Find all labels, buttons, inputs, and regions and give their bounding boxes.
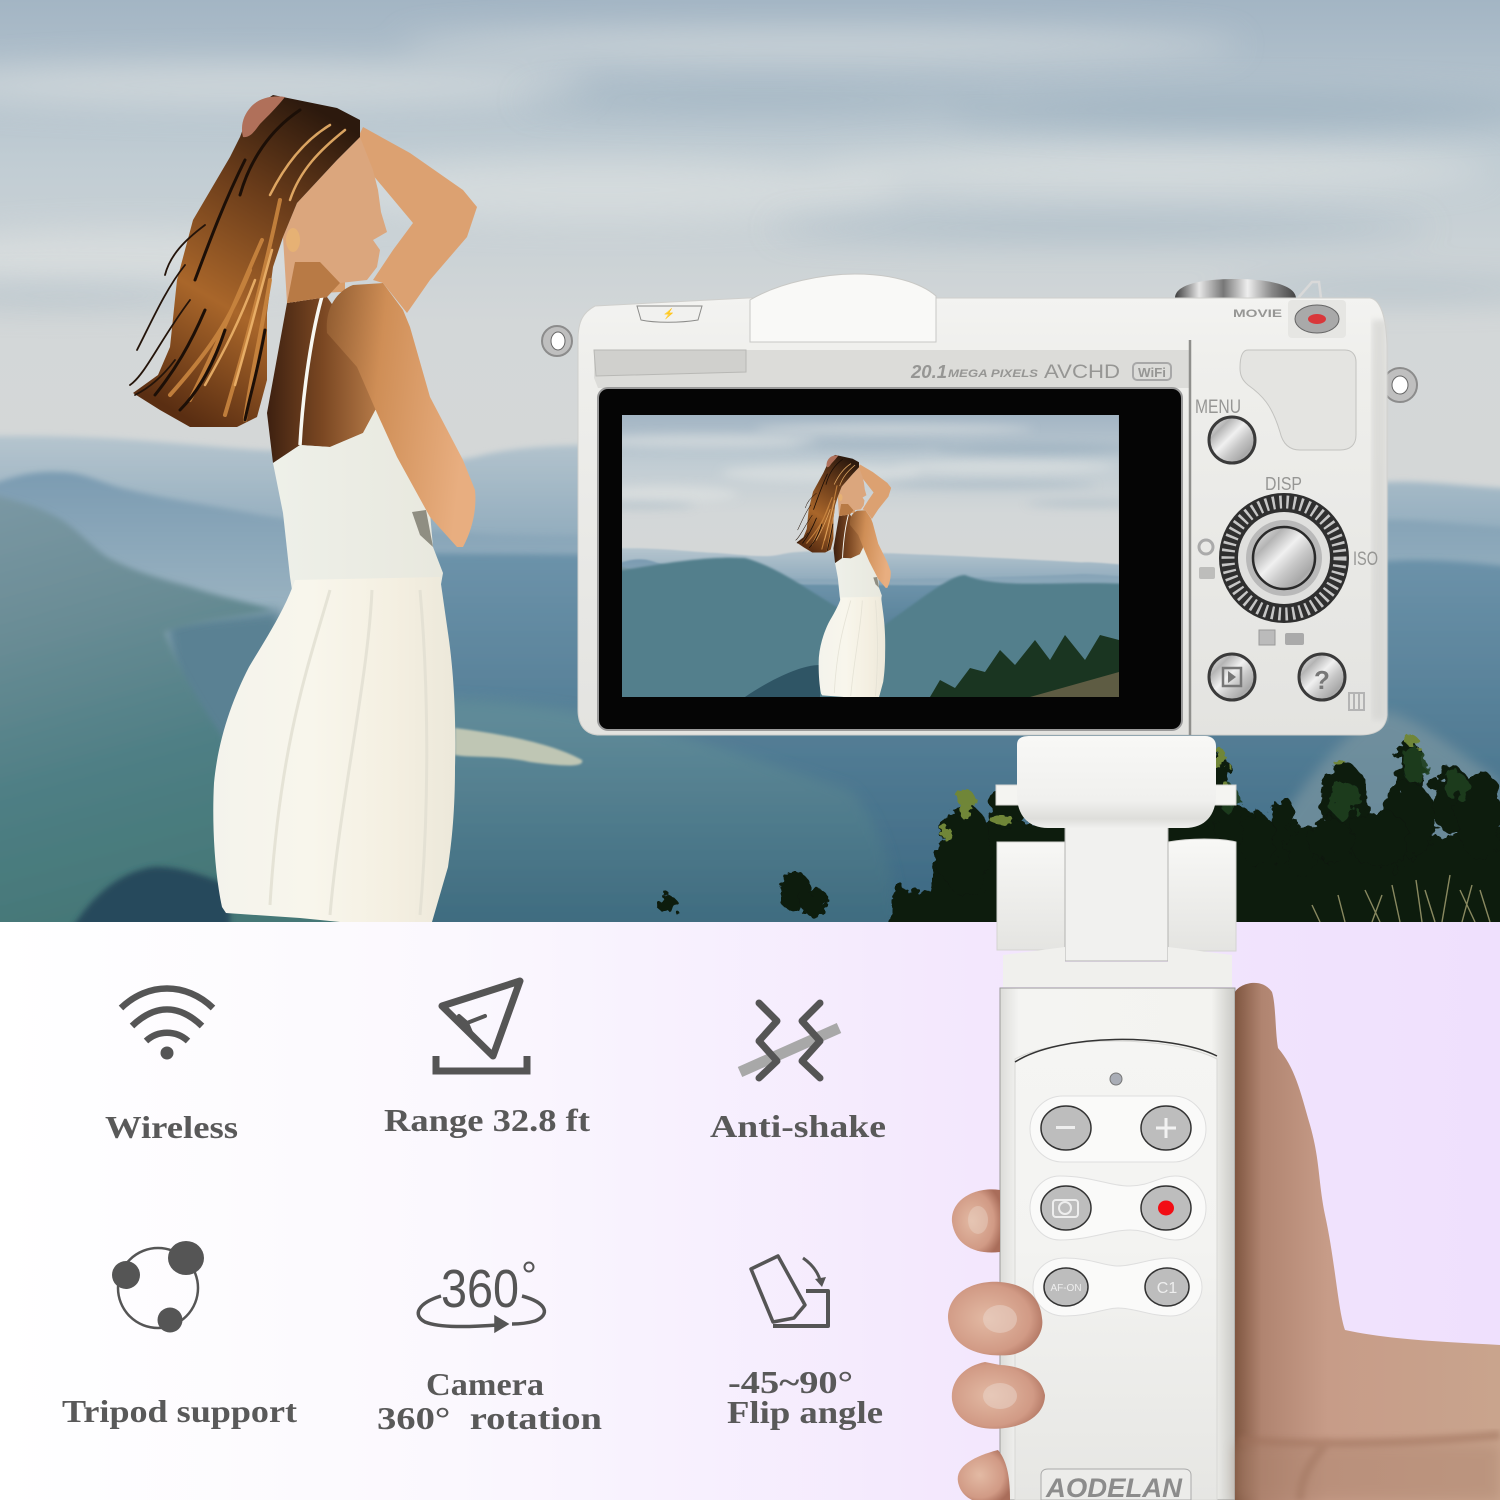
icon: flip screen — [751, 1256, 828, 1326]
preview grass — [1030, 672, 1119, 697]
flash hot-shoe plate — [594, 350, 746, 376]
icon: 360 degree orbit: 360 — [441, 1259, 519, 1319]
lower palm shadow — [1235, 1445, 1500, 1500]
panel top edge — [1015, 1039, 1217, 1062]
camera mount head — [1017, 736, 1216, 828]
finger two — [948, 1282, 1042, 1355]
icon: paper plane over tray — [436, 981, 527, 1071]
palm and thumb — [1235, 983, 1500, 1500]
palm crease shading — [1240, 1435, 1500, 1500]
tilt arm — [1065, 825, 1168, 961]
background photo: sky and mountains — [0, 0, 1500, 960]
zoom buttons — [1030, 1096, 1206, 1162]
flash button: ⚡ — [663, 307, 675, 320]
shutter and record buttons — [1030, 1176, 1206, 1240]
camera body — [578, 298, 1387, 735]
label: camera 360 rotation: 360° rotation — [377, 1400, 602, 1436]
icon: 360 degree orbit — [418, 1259, 544, 1330]
treeline at lower right of photo — [659, 737, 1500, 940]
control wheel — [1199, 474, 1378, 645]
tripod grip — [996, 736, 1236, 1500]
right edge shading — [1372, 320, 1387, 720]
menu button: MENU — [1195, 397, 1241, 418]
camera specification text: AVCHD — [1044, 362, 1120, 383]
camera specification text: WiFi — [1138, 365, 1166, 380]
custom buttons: AF-ON — [1050, 1283, 1082, 1294]
camera specification text: MEGA PIXELS — [948, 368, 1039, 380]
label: flip angle: -45~90° — [728, 1364, 853, 1400]
flash hump — [750, 274, 936, 342]
preview woman — [796, 455, 891, 698]
hand holding grip — [948, 983, 1500, 1500]
icon: wifi — [121, 988, 213, 1057]
feature: flip angle — [727, 1256, 883, 1430]
camera specification text: 20.1 — [910, 362, 947, 382]
label: wireless: Wireless — [105, 1109, 238, 1145]
feature: wireless — [105, 988, 238, 1145]
remote panel — [1015, 1041, 1217, 1500]
control wheel: DISP — [1265, 474, 1302, 494]
lower feature panel background — [0, 922, 1500, 1500]
feature: 360 rotation — [377, 1259, 602, 1436]
mount head side tabs — [996, 785, 1236, 805]
tripod hinge block — [997, 839, 1236, 951]
label: range: Range 32.8 ft — [384, 1102, 590, 1138]
custom buttons: C1 — [1157, 1280, 1177, 1297]
label: camera 360 rotation — [377, 1366, 602, 1436]
icon: shake waves with slash — [740, 1003, 839, 1078]
woman in white dress — [130, 95, 477, 922]
finger three — [952, 1362, 1045, 1429]
playback button — [1209, 654, 1255, 700]
grip handle — [1000, 988, 1235, 1500]
custom buttons — [1033, 1258, 1202, 1316]
label: anti-shake: Anti-shake — [710, 1108, 886, 1144]
thumb rest — [1240, 350, 1356, 450]
right grip divider — [1189, 340, 1191, 735]
label: tripod support: Tripod support — [62, 1393, 297, 1429]
right strap lug — [1383, 368, 1417, 402]
indicator LED — [1110, 1073, 1122, 1085]
upper display band — [594, 350, 1190, 388]
label: flip angle — [727, 1364, 883, 1430]
camera — [542, 274, 1417, 735]
preview background scene — [589, 415, 1145, 709]
menu button — [1195, 397, 1255, 463]
icon: three nodes on a ring — [112, 1241, 204, 1332]
left strap lug — [542, 326, 572, 356]
label: flip angle: Flip angle — [727, 1394, 883, 1430]
finger four — [958, 1450, 1010, 1500]
hinge collar — [1003, 947, 1232, 987]
finger one — [952, 1189, 1000, 1253]
preview left mountains — [612, 558, 1130, 710]
flash button — [637, 306, 702, 322]
preview trees — [930, 635, 1119, 697]
movie button — [1233, 300, 1346, 338]
control wheel: ISO — [1353, 549, 1378, 570]
trash icon — [1349, 693, 1364, 710]
camera specification text — [910, 362, 1171, 383]
feature: range — [384, 981, 590, 1138]
help button — [1299, 654, 1345, 700]
feature: anti-shake — [710, 1003, 886, 1144]
help button: ? — [1314, 665, 1330, 695]
rear screen bezel — [598, 388, 1182, 730]
movie button: MOVIE — [1233, 308, 1282, 320]
screen image preview — [622, 415, 1119, 697]
top control dial — [1175, 279, 1321, 298]
feature: tripod support — [62, 1241, 297, 1429]
preview dark foothills — [745, 665, 820, 697]
label: camera 360 rotation: Camera — [426, 1366, 544, 1402]
